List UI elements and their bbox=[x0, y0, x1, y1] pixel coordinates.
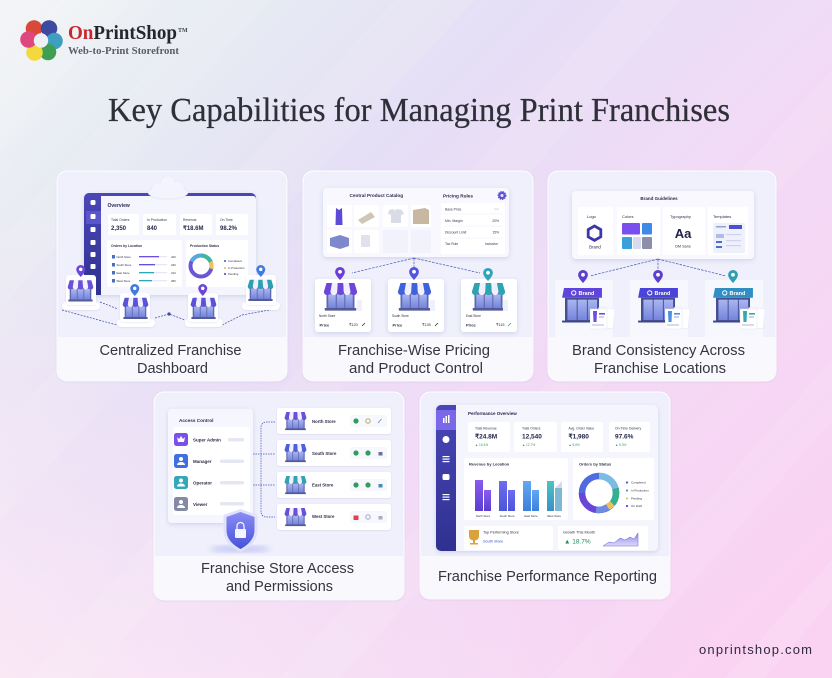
product: papers bbox=[358, 212, 375, 224]
store card: east bbox=[461, 268, 517, 332]
caption band bbox=[420, 556, 670, 599]
chart: orders by status donut: In Production bbox=[631, 488, 649, 492]
dashboard window bbox=[84, 193, 256, 295]
branded store: 1 bbox=[555, 270, 615, 337]
connector lines bbox=[590, 259, 726, 276]
heading: overview: Overview bbox=[108, 203, 130, 209]
stat: revenue bbox=[180, 214, 212, 235]
store row: east: East Store bbox=[312, 482, 334, 488]
icon: gear bbox=[498, 192, 506, 199]
stat: total orders bbox=[514, 422, 557, 452]
stat: total orders: Total Orders bbox=[522, 426, 541, 430]
branded store: 3: Brand bbox=[730, 291, 745, 297]
chart: orders by status donut: On Hold bbox=[631, 504, 642, 508]
caption band bbox=[548, 337, 776, 381]
logo tagline: Web-to-Print Storefront bbox=[68, 46, 180, 57]
connector lines bbox=[62, 302, 280, 325]
store card: north bbox=[315, 267, 371, 332]
role: viewer: Viewer bbox=[193, 502, 208, 507]
chart: production status donut: Completed bbox=[228, 259, 242, 263]
store platform 2 bbox=[117, 284, 155, 327]
title: Key Capabilities for Managing Print Franchises bbox=[108, 92, 730, 129]
caption bbox=[100, 343, 242, 377]
website url: onprintshop.com bbox=[699, 642, 812, 657]
caption bbox=[338, 343, 490, 377]
chart: orders by location: 280 bbox=[171, 279, 176, 283]
dashboard window bbox=[436, 405, 658, 551]
pricing rules bbox=[436, 191, 508, 255]
chart: production status donut: Production Status bbox=[190, 244, 219, 248]
colour swatches bbox=[622, 223, 652, 249]
stat: total orders: 12,540 bbox=[522, 434, 542, 440]
icon: brand logo bbox=[588, 226, 601, 240]
panel: centralized franchise dashboard bbox=[57, 171, 287, 381]
caption: Centralized Franchise bbox=[100, 343, 242, 359]
pricing rules: Min. Margin bbox=[445, 219, 463, 223]
chart: production status donut: Pending bbox=[228, 272, 239, 276]
store platform 4 bbox=[242, 265, 280, 310]
brand guidelines: Templates bbox=[713, 214, 731, 219]
caption: Brand Consistency Across bbox=[572, 343, 745, 359]
card: top performing store bbox=[464, 526, 553, 550]
store row: north bbox=[277, 408, 391, 434]
panel: brand consistency bbox=[548, 171, 776, 381]
stat: total revenue: ▲ 16.4% bbox=[475, 443, 488, 447]
branded store: 3 bbox=[705, 270, 765, 337]
caption: Franchise Performance Reporting bbox=[438, 569, 657, 585]
sidebar bbox=[436, 405, 456, 551]
central product catalog: Central Product Catalog bbox=[350, 193, 403, 198]
chart: orders by location: 310 bbox=[171, 271, 176, 275]
brand guidelines bbox=[572, 191, 754, 259]
role: super admin: Super Admin bbox=[193, 438, 221, 442]
stat: in production bbox=[143, 214, 176, 235]
stat: on-time delivery: On-Time Delivery bbox=[615, 426, 642, 430]
stat: total orders: 2,350 bbox=[111, 226, 127, 232]
branded store: 2 bbox=[630, 270, 690, 337]
store platform 3 bbox=[185, 284, 223, 327]
caption band bbox=[154, 556, 404, 600]
connector lines bbox=[352, 258, 480, 273]
card: growth this month: Growth This Month bbox=[563, 530, 595, 534]
card: growth this month: ▲ 18.7% bbox=[564, 538, 591, 546]
caption band bbox=[303, 337, 533, 381]
pricing rules: Discount Limit bbox=[445, 230, 466, 234]
chart: revenue by location: South Store bbox=[500, 514, 515, 518]
brand guidelines: Typography bbox=[670, 214, 691, 219]
store card: north: Price bbox=[320, 322, 330, 328]
caption bbox=[572, 343, 745, 377]
pricing rules: Pricing Rules bbox=[443, 194, 473, 198]
stat: total revenue bbox=[468, 422, 510, 452]
stat: average order value: Avg. Order Value bbox=[568, 426, 594, 430]
caption: Franchise Store Access bbox=[201, 561, 354, 577]
chart: production status donut bbox=[186, 240, 248, 287]
role: operator: Operator bbox=[193, 480, 212, 486]
stat: on time bbox=[216, 214, 248, 235]
sparkline bbox=[603, 533, 638, 546]
caption: Franchise Locations bbox=[594, 361, 726, 377]
chart: revenue by location: West Store bbox=[547, 514, 561, 518]
pricing rules: Tax Rule bbox=[445, 242, 458, 246]
stat: average order value bbox=[561, 422, 603, 452]
brand guidelines: Aa bbox=[675, 226, 692, 241]
icon: colour flower logo bbox=[20, 20, 63, 61]
stat: average order value: ▲ 8.6% bbox=[568, 443, 580, 447]
brand guidelines: Colors bbox=[622, 214, 634, 219]
chart: revenue by location bbox=[464, 458, 568, 520]
stat: on time: On Time bbox=[220, 218, 233, 222]
chart: orders by location: South Store bbox=[116, 263, 132, 267]
stat: on-time delivery: 97.6% bbox=[615, 434, 634, 440]
store card: north: ₹120 bbox=[349, 323, 358, 327]
stat: revenue: Revenue bbox=[183, 218, 197, 222]
stat: total revenue: Total Revenue bbox=[475, 426, 497, 430]
stat: average order value: ₹1,980 bbox=[568, 432, 589, 440]
caption bbox=[201, 561, 354, 595]
card: growth this month bbox=[558, 526, 648, 550]
caption band bbox=[57, 337, 287, 381]
store card: east: ₹115 bbox=[496, 323, 504, 327]
store platform 1 bbox=[62, 265, 100, 310]
store card: south bbox=[388, 267, 444, 332]
store card: north: North Store bbox=[319, 314, 336, 318]
store card: east: East Store bbox=[466, 314, 481, 318]
stat: total orders: Total Orders bbox=[111, 218, 130, 222]
chart: orders by location: 420 bbox=[171, 255, 176, 259]
panel: store access and permissions bbox=[154, 392, 404, 600]
chart: production status donut: In Production bbox=[228, 266, 245, 270]
chart: orders by status donut: Pending bbox=[631, 496, 642, 500]
stat: on time: 98.2% bbox=[220, 226, 238, 232]
store row: west: West Store bbox=[312, 514, 335, 519]
access control card bbox=[168, 409, 253, 523]
stat: total orders bbox=[108, 214, 139, 235]
caption: and Product Control bbox=[349, 361, 483, 377]
connector lines bbox=[253, 422, 275, 517]
branded store: 2: Brand bbox=[654, 291, 670, 297]
stat: on-time delivery: ▲ 5.3% bbox=[615, 443, 626, 447]
shield with padlock bbox=[210, 509, 270, 552]
stat: in production: In Production bbox=[147, 218, 167, 222]
product: tray box bbox=[330, 235, 349, 249]
stat: total orders: ▲ 12.7% bbox=[522, 443, 535, 447]
chart: revenue by location: Revenue by Location bbox=[469, 462, 510, 466]
store row: south: South Store bbox=[312, 451, 337, 456]
product: bag bbox=[336, 208, 342, 225]
role: manager: Manager bbox=[193, 459, 212, 464]
chart: orders by location: East Store bbox=[116, 271, 130, 275]
store row: east bbox=[277, 472, 391, 498]
product: box bbox=[413, 208, 429, 224]
stat: revenue: ₹18.6M bbox=[183, 225, 204, 232]
chart: orders by status donut bbox=[573, 458, 654, 520]
store row: west bbox=[277, 504, 391, 530]
chart: revenue by location: North Store bbox=[476, 514, 491, 518]
pricing rules: Base Price bbox=[445, 208, 462, 212]
chart: orders by status donut: Completed bbox=[631, 480, 646, 484]
chart: orders by location bbox=[107, 240, 182, 287]
stat: in production: 840 bbox=[147, 226, 158, 232]
template preview bbox=[713, 223, 745, 253]
logo bbox=[20, 20, 188, 61]
caption: Dashboard bbox=[137, 361, 208, 377]
chart: revenue by location: East Store bbox=[524, 514, 538, 518]
caption: Franchise-Wise Pricing bbox=[338, 343, 490, 359]
logo wordmark: OnPrintShop bbox=[68, 22, 177, 44]
access control card: Access Control bbox=[179, 418, 213, 423]
logo trademark: TM bbox=[178, 28, 188, 34]
pricing rules: 20% bbox=[492, 219, 499, 223]
store card: east: Price bbox=[466, 322, 477, 328]
pricing rules: Inclusive bbox=[485, 242, 498, 246]
store card: south: Price bbox=[392, 322, 403, 328]
icon: cloud bbox=[148, 176, 188, 198]
chart: orders by location: North Store bbox=[116, 255, 131, 259]
panel: franchise-wise pricing bbox=[303, 171, 533, 381]
stat: on-time delivery bbox=[609, 422, 650, 452]
brand guidelines: Brand Guidelines bbox=[640, 196, 678, 201]
card: top performing store: South Store bbox=[483, 540, 503, 544]
panel: performance reporting bbox=[420, 392, 670, 599]
icon: trophy bbox=[469, 530, 479, 544]
branded store: 1: Brand bbox=[578, 291, 594, 297]
brand guidelines: Brand bbox=[589, 244, 601, 250]
brand guidelines: DM Sans bbox=[675, 244, 691, 248]
caption: and Permissions bbox=[226, 579, 333, 595]
store row: south bbox=[277, 440, 391, 466]
chart: orders by location: Orders by Location bbox=[111, 244, 142, 248]
product: mug bbox=[361, 235, 370, 247]
pricing rules: 15% bbox=[492, 230, 499, 234]
stat: total revenue: ₹24.8M bbox=[475, 432, 497, 440]
product: t-shirt bbox=[388, 209, 404, 223]
central product catalog bbox=[323, 188, 509, 257]
chart: orders by location: 340 bbox=[171, 263, 176, 267]
chart: orders by status donut: Orders by Status bbox=[579, 462, 612, 466]
store card: south: South Store bbox=[392, 314, 409, 318]
store row: north: North Store bbox=[312, 419, 336, 424]
card: top performing store: Top Performing Store bbox=[483, 530, 519, 534]
chart: orders by location: West Store bbox=[116, 279, 131, 283]
store card: south: ₹135 bbox=[422, 323, 431, 327]
brand guidelines: Logo bbox=[587, 214, 597, 219]
heading: performance overview: Performance Overview bbox=[468, 411, 517, 416]
